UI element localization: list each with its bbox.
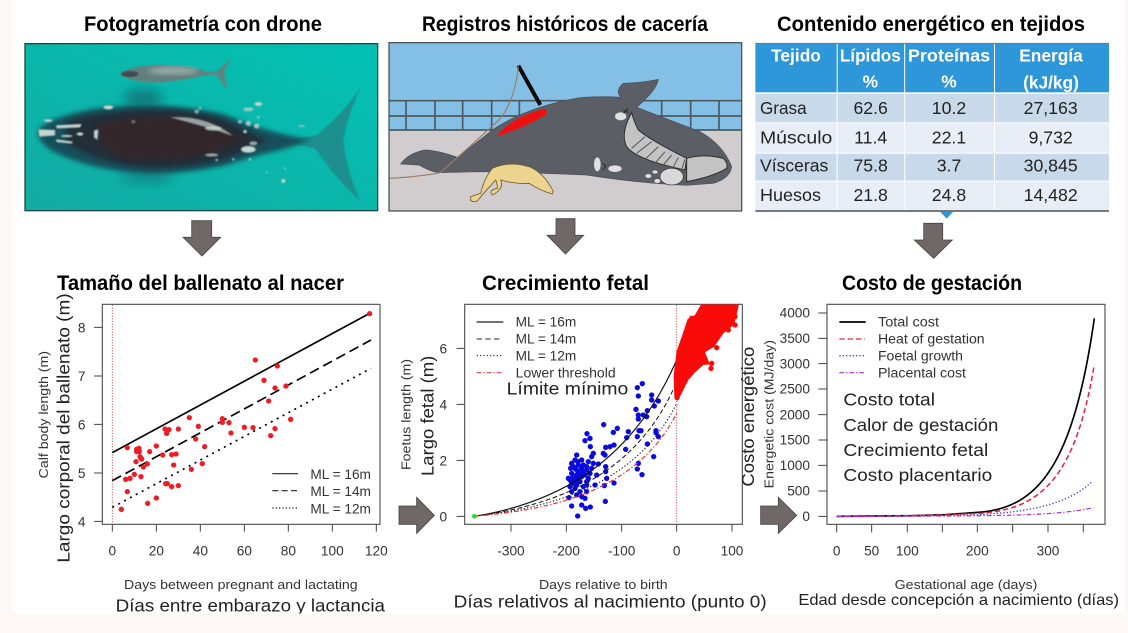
chart: gestation cost: 0	[802, 509, 810, 524]
table: energy content of tissues: 30,845	[1024, 156, 1078, 176]
chart: foetal growth: 4	[440, 397, 448, 412]
chart: gestation cost: Foetal growth	[878, 349, 963, 364]
rope	[389, 67, 518, 178]
chart: gestation cost: Gestational age (days)	[895, 577, 1037, 592]
chart: gestation cost: Energetic cost (MJ/day)	[761, 340, 776, 488]
chart: gestation cost: 200	[966, 543, 989, 558]
chart: calf length vs days: 7	[78, 369, 85, 384]
chart: gestation cost: 500	[787, 484, 810, 499]
chart: foetal growth: 2	[440, 453, 447, 468]
table: energy content of tissues: Vísceras	[760, 156, 829, 176]
chart: foetal growth: -300	[497, 543, 525, 558]
chart: gestation cost: 100	[896, 543, 919, 558]
table: energy content of tissues: 14,482	[1024, 185, 1078, 205]
chart: gestation cost: 1000	[780, 458, 810, 473]
foetus	[471, 164, 553, 202]
chart: foetal growth: 100	[721, 543, 744, 558]
chart: gestation cost: 4000	[780, 306, 810, 321]
arrow: down, whaling records	[547, 219, 584, 254]
panel: historical whaling illustration	[389, 43, 742, 211]
table: energy content of tissues	[755, 43, 1109, 219]
chart: gestation cost: 1500	[780, 433, 810, 448]
title: Fotogrametría con drone: Fotogrametría con drone	[84, 13, 322, 36]
chart: calf length vs days: 8	[78, 320, 85, 335]
title: Tamaño del ballenato al nacer: Tamaño del ballenato al nacer	[57, 272, 344, 295]
chart: calf length vs days: 5	[78, 466, 86, 481]
chart: foetal growth: Límite mínimo	[507, 378, 628, 398]
harpoon	[518, 66, 540, 105]
chart: foetal growth: Largo fetal (m)	[418, 356, 438, 476]
chart: calf length vs days: 4	[78, 514, 86, 529]
chart: gestation cost: Calor de gestación	[843, 415, 998, 435]
red wound	[497, 109, 547, 136]
chart: gestation cost: 0	[833, 543, 841, 558]
chart: gestation cost: 2000	[780, 407, 810, 422]
chart: foetal growth: 0	[673, 543, 681, 558]
table: energy content of tissues: Lípidos	[840, 46, 901, 66]
chart: gestation cost	[738, 304, 1119, 609]
table: energy content of tissues: 27,163	[1024, 98, 1078, 118]
chart: gestation cost: 50	[864, 543, 880, 558]
chart: calf length vs days	[36, 293, 388, 616]
table: energy content of tissues: 10.2	[932, 98, 966, 118]
chart: calf length vs days: Calf body length (m)	[36, 351, 51, 478]
chart: calf length vs days: 60	[237, 543, 252, 558]
table: energy content of tissues: 24.8	[932, 185, 966, 205]
table: energy content of tissues: Huesos	[760, 185, 821, 205]
chart: gestation cost: 2500	[780, 382, 810, 397]
chart: foetal growth: ML = 12m	[516, 349, 576, 364]
chart: foetal growth	[399, 304, 767, 612]
title: Registros históricos de cacería: Registros históricos de cacería	[422, 13, 708, 36]
chart: foetal growth: Days relative to birth	[539, 577, 668, 592]
chart: gestation cost: Placental cost	[878, 366, 966, 381]
chart: gestation cost: Costo energético	[738, 347, 758, 487]
chart: calf length vs days: 80	[281, 543, 296, 558]
chart: gestation cost: Costo total	[843, 390, 935, 410]
chart: gestation cost: Heat of gestation	[878, 332, 985, 347]
title: Contenido energético en tejidos: Contenido energético en tejidos	[777, 13, 1085, 36]
arrow: right into cost chart	[761, 497, 797, 533]
chart: calf length vs days: ML = 16m	[310, 467, 371, 482]
table: energy content of tissues: 75.8	[853, 156, 888, 176]
chart: gestation cost: Total cost	[878, 315, 939, 330]
table: energy content of tissues: 3.7	[937, 156, 961, 176]
table: energy content of tissues: 11.4	[854, 127, 887, 147]
chart: foetal growth: ML = 16m	[516, 315, 576, 330]
chart: foetal growth: Días relativos al nacimiento (punto 0)	[454, 592, 767, 612]
arrow: right into foetal chart	[399, 497, 434, 533]
table: energy content of tissues: 22.1	[932, 127, 966, 147]
chart: gestation cost: Crecimiento fetal	[843, 440, 988, 460]
chart: gestation cost: 3500	[780, 331, 810, 346]
chart: foetal growth: -100	[608, 543, 636, 558]
arrow: down, tissues	[914, 223, 952, 258]
table: energy content of tissues: Grasa	[760, 98, 807, 118]
table: energy content of tissues: 9,732	[1029, 127, 1073, 147]
table: energy content of tissues: %	[863, 72, 878, 92]
whale carcass	[401, 79, 732, 185]
chart: foetal growth: Lower threshold	[516, 366, 616, 381]
table: energy content of tissues: (kJ/kg)	[1023, 72, 1079, 92]
chart: calf length vs days: 40	[193, 543, 208, 558]
chart: calf length vs days: 20	[149, 543, 164, 558]
chart: calf length vs days: 100	[321, 543, 344, 558]
chart: foetal growth: -200	[553, 543, 580, 558]
arrow: down, drone	[183, 221, 221, 256]
table: energy content of tissues: 62.6	[853, 98, 888, 118]
chart: foetal growth: ML = 14m	[516, 332, 576, 347]
chart: calf length vs days: Días entre embarazo y lactancia	[116, 596, 385, 616]
table: energy content of tissues: Tejido	[771, 46, 821, 66]
panel: drone photo of whale and calf	[25, 44, 378, 211]
chart: calf length vs days: 6	[78, 417, 85, 432]
table: energy content of tissues: Músculo	[760, 127, 833, 147]
chart: gestation cost: 3000	[780, 356, 810, 371]
chart: gestation cost: 300	[1037, 543, 1060, 558]
table: energy content of tissues: 21.8	[853, 185, 888, 205]
chart: calf length vs days: 120	[365, 543, 388, 558]
title: Costo de gestación: Costo de gestación	[842, 272, 1022, 295]
chart: gestation cost: Costo placentario	[843, 465, 992, 485]
table: energy content of tissues: Proteínas	[908, 46, 990, 66]
chart: calf length vs days: ML = 12m	[310, 501, 371, 516]
chart: calf length vs days: 0	[109, 543, 117, 558]
chart: calf length vs days: Largo corporal del ballenato (m)	[53, 293, 73, 563]
red postnatal points	[674, 304, 739, 401]
title: Crecimiento fetal: Crecimiento fetal	[482, 272, 649, 295]
table: energy content of tissues: %	[941, 72, 957, 92]
chart: gestation cost: Edad desde concepción a nacimiento (días)	[798, 592, 1119, 609]
chart: calf length vs days: ML = 14m	[310, 484, 371, 499]
chart: foetal growth: 0	[440, 509, 448, 524]
chart: calf length vs days: Days between pregnant and lactating	[124, 577, 358, 592]
chart: foetal growth: 6	[440, 341, 447, 356]
table: energy content of tissues: Energía	[1019, 46, 1083, 66]
chart: foetal growth: Foetus length (m)	[399, 359, 414, 470]
